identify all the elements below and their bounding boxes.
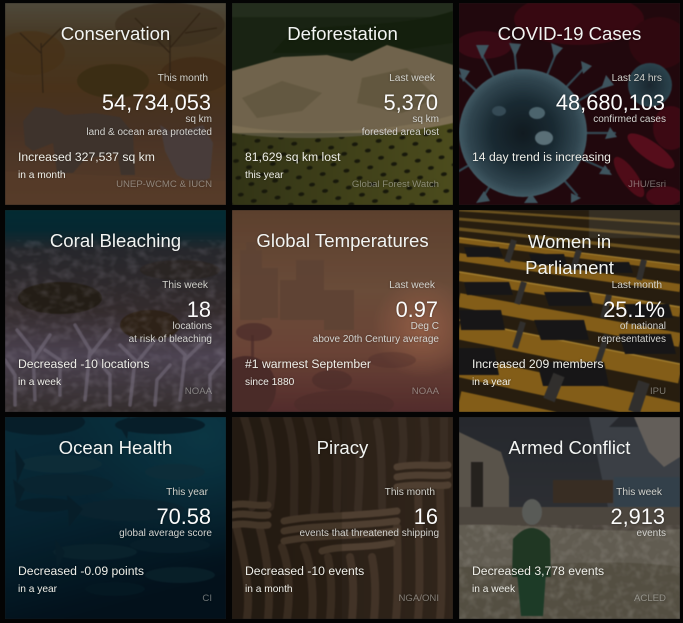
title: Conservation (61, 23, 170, 44)
time period: This month (385, 487, 435, 498)
change text: 14 day trend is increasing (472, 150, 611, 164)
change period: this year (245, 170, 284, 181)
metric unit: sq km (412, 114, 439, 125)
metric value: 70.58 (156, 504, 211, 529)
change text: Decreased -10 locations (18, 357, 149, 371)
title: Global Temperatures (256, 230, 429, 251)
title: Coral Bleaching (50, 230, 181, 251)
source: NOAA (185, 386, 212, 397)
background: knotted ropes (232, 417, 453, 619)
source: JHU/Esri (628, 179, 666, 190)
metric description: confirmed cases (593, 114, 666, 125)
background: child among ruins (459, 417, 680, 619)
background: school of tuna (5, 417, 226, 619)
background: rows of parliament desks (459, 210, 680, 412)
panel: women in parliament (459, 210, 680, 412)
panel: coral bleaching (5, 210, 226, 412)
metric description: representatives (598, 334, 666, 345)
source: NOAA (412, 386, 439, 397)
title: Women in (528, 231, 611, 252)
title: Piracy (317, 437, 368, 458)
time period: Last week (389, 73, 435, 84)
change text: Decreased 3,778 events (472, 564, 604, 578)
source: UNEP-WCMC & IUCN (116, 179, 212, 190)
change period: in a month (18, 170, 66, 181)
background: cleared forest and plantation (232, 3, 453, 205)
change text: Increased 327,537 sq km (18, 150, 155, 164)
change text: #1 warmest September (245, 357, 371, 371)
metric unit: sq km (185, 114, 212, 125)
change period: since 1880 (245, 377, 294, 388)
metric value: 18 (187, 297, 211, 322)
change period: in a month (245, 584, 293, 595)
metric description: events that threatened shipping (299, 528, 439, 539)
change period: in a year (18, 584, 57, 595)
source: IPU (650, 386, 666, 397)
panel: ocean health (5, 417, 226, 619)
panel: global temperatures (232, 210, 453, 412)
background: bleached coral reef (5, 210, 226, 412)
time period: This year (166, 487, 208, 498)
metric description: global average score (119, 528, 212, 539)
title: COVID-19 Cases (498, 23, 641, 44)
time period: Last month (612, 280, 662, 291)
panel: piracy (232, 417, 453, 619)
change period: in a week (18, 377, 61, 388)
metric description: land & ocean area protected (86, 127, 212, 138)
metric value: 0.97 (396, 297, 438, 322)
metric unit: Deg C (411, 321, 439, 332)
metric value: 16 (414, 504, 438, 529)
metric unit: locations (173, 321, 212, 332)
title: Ocean Health (59, 437, 172, 458)
change period: in a year (472, 377, 511, 388)
time period: This week (616, 487, 662, 498)
panel: conservation (5, 3, 226, 205)
metric description: events (637, 528, 666, 539)
time period: This week (162, 280, 208, 291)
title: Parliament (525, 256, 614, 278)
panel: covid-19 cases (459, 3, 680, 205)
panel: armed conflict (459, 417, 680, 619)
change text: 81,629 sq km lost (245, 150, 341, 164)
metric description: forested area lost (362, 127, 439, 138)
background: rhinos on savanna (5, 3, 226, 205)
change text: Decreased -0.09 points (18, 564, 144, 578)
metric description: above 20th Century average (313, 334, 439, 345)
title (525, 231, 614, 278)
source: ACLED (634, 593, 666, 604)
metric value: 54,734,053 (102, 90, 211, 115)
metric description: at risk of bleaching (129, 334, 212, 345)
metric value: 48,680,103 (556, 90, 665, 115)
change period: in a week (472, 584, 515, 595)
change text: Decreased -10 events (245, 564, 364, 578)
metric value: 25.1% (603, 297, 665, 322)
time period: Last 24 hrs (612, 73, 662, 84)
source: CI (202, 593, 212, 604)
metric value: 2,913 (610, 504, 665, 529)
source: NGA/ONI (398, 593, 439, 604)
title: Armed Conflict (509, 437, 630, 458)
background: smoggy city skyline with palms (232, 210, 453, 412)
title: Deforestation (287, 23, 398, 44)
panel: deforestation (232, 3, 453, 205)
source: Global Forest Watch (352, 179, 439, 190)
time period: Last week (389, 280, 435, 291)
metric value: 5,370 (383, 90, 438, 115)
background: coronavirus particle (459, 3, 680, 205)
time period: This month (158, 73, 208, 84)
change text: Increased 209 members (472, 357, 603, 371)
metric unit: of national (620, 321, 666, 332)
